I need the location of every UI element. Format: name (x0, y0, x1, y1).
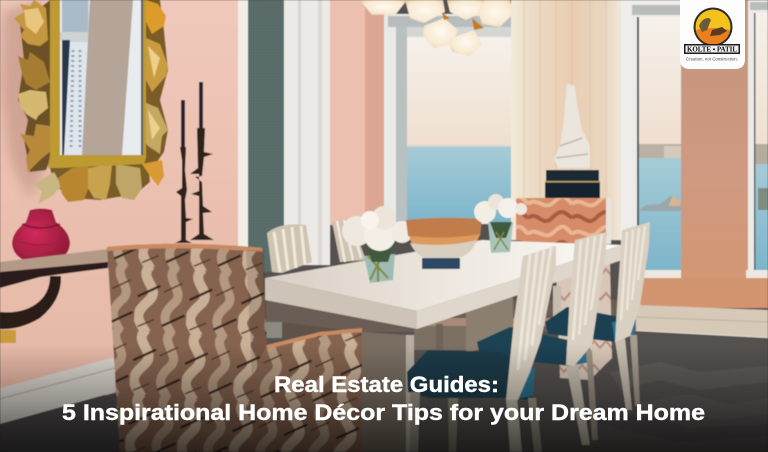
slatted back chairs (267, 218, 366, 273)
leaf shadow (0, 0, 44, 200)
left baseboard and floor (0, 357, 118, 452)
herringbone floor (414, 331, 768, 452)
mirror glass (60, 0, 143, 155)
right window (632, 0, 685, 278)
white flowers in vase left (342, 206, 413, 283)
sculpture on plinth (545, 84, 600, 198)
far right window (746, 0, 768, 278)
blue seat white chair front (407, 246, 556, 452)
white flowers in vase right (474, 194, 527, 253)
terracotta wall (681, 0, 749, 306)
title line 2: 5 Inspirational Home Décor Tips for your Dream Home (62, 400, 705, 425)
title (62, 372, 705, 425)
centre window (384, 14, 512, 224)
candlesticks (175, 82, 214, 243)
dining table (265, 240, 622, 329)
bowl (406, 218, 482, 269)
back floor and wall strip (266, 300, 636, 350)
patterned far chair (516, 198, 612, 380)
gilded leaf frame (14, 0, 168, 204)
bottom dark gradient (0, 345, 768, 452)
blue seat white chair right (545, 222, 650, 410)
patterned armchair (107, 244, 362, 452)
chandelier (360, 0, 513, 56)
gold mirror (0, 0, 168, 204)
title line 1: Real Estate Guides: (274, 372, 499, 397)
table pedestals (282, 286, 561, 452)
curtain (511, 0, 636, 320)
red vase (12, 208, 70, 264)
mirror frame (48, 0, 146, 168)
logo badge (680, 0, 745, 69)
console table (0, 249, 108, 343)
logo nameplate: KOLTE ▪ PATIL (687, 46, 737, 54)
blue seat white chair middle (477, 232, 607, 445)
logo tagline: Creation, not Construction. (686, 56, 738, 62)
lower right wall and baseboard (636, 278, 768, 338)
logo emblem (694, 8, 732, 46)
